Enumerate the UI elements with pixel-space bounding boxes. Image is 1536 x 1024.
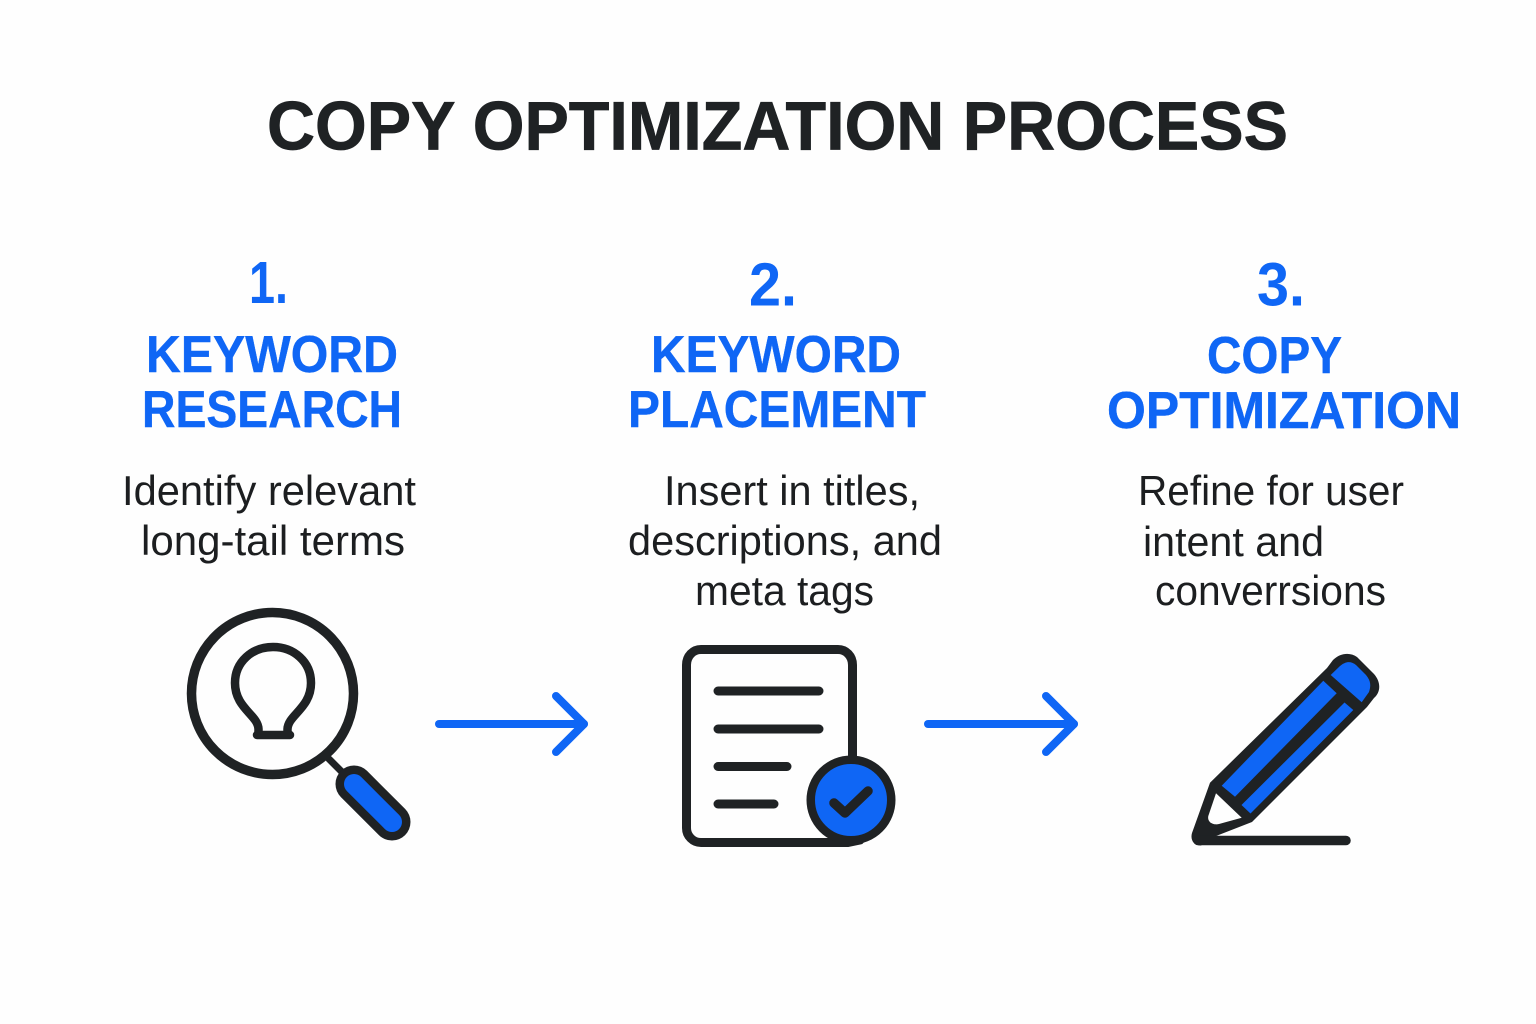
heading: keyword placement: KEYWORD xyxy=(651,326,901,384)
description: step 3 xyxy=(1138,467,1404,614)
description: step 3: Refine for user xyxy=(1138,467,1404,514)
arrow: step 1 to step 2 xyxy=(439,696,584,752)
description: step 2: meta tags xyxy=(695,567,874,614)
panel: step 2 keyword placement xyxy=(628,250,942,842)
title: COPY OPTIMIZATION PROCESS xyxy=(267,88,1288,164)
heading: copy optimization: OPTIMIZATION xyxy=(1107,382,1461,440)
heading: keyword placement xyxy=(628,326,926,439)
description: step 2 xyxy=(628,467,942,614)
heading: keyword placement: PLACEMENT xyxy=(628,381,926,439)
description: step 1: Identify relevant xyxy=(122,467,416,514)
heading: copy optimization xyxy=(1107,327,1461,440)
icon: magnifying glass with light bulb xyxy=(192,612,392,822)
heading: keyword research: KEYWORD xyxy=(146,326,398,384)
step number 1: 1. xyxy=(249,250,288,316)
panel: step 3 copy optimization xyxy=(1107,250,1461,846)
heading: keyword research: RESEARCH xyxy=(142,381,402,439)
arrow: step 2 to step 3 xyxy=(928,696,1074,752)
description: step 3: converrsions xyxy=(1155,567,1386,614)
heading: copy optimization: COPY xyxy=(1207,327,1342,385)
heading: keyword research xyxy=(142,326,402,439)
description: step 2: descriptions, and xyxy=(628,517,942,564)
description: step 2: Insert in titles, xyxy=(664,467,920,514)
icon: pencil drawing a line xyxy=(1191,654,1379,846)
panel: step 1 keyword research xyxy=(122,250,416,822)
icon: document with check badge xyxy=(686,650,891,842)
description: step 1: long-tail terms xyxy=(141,517,405,564)
description: step 3: intent and xyxy=(1143,518,1324,565)
step number 3: 3. xyxy=(1257,250,1305,318)
description: step 1 xyxy=(122,467,416,564)
step number 2: 2. xyxy=(749,250,797,318)
